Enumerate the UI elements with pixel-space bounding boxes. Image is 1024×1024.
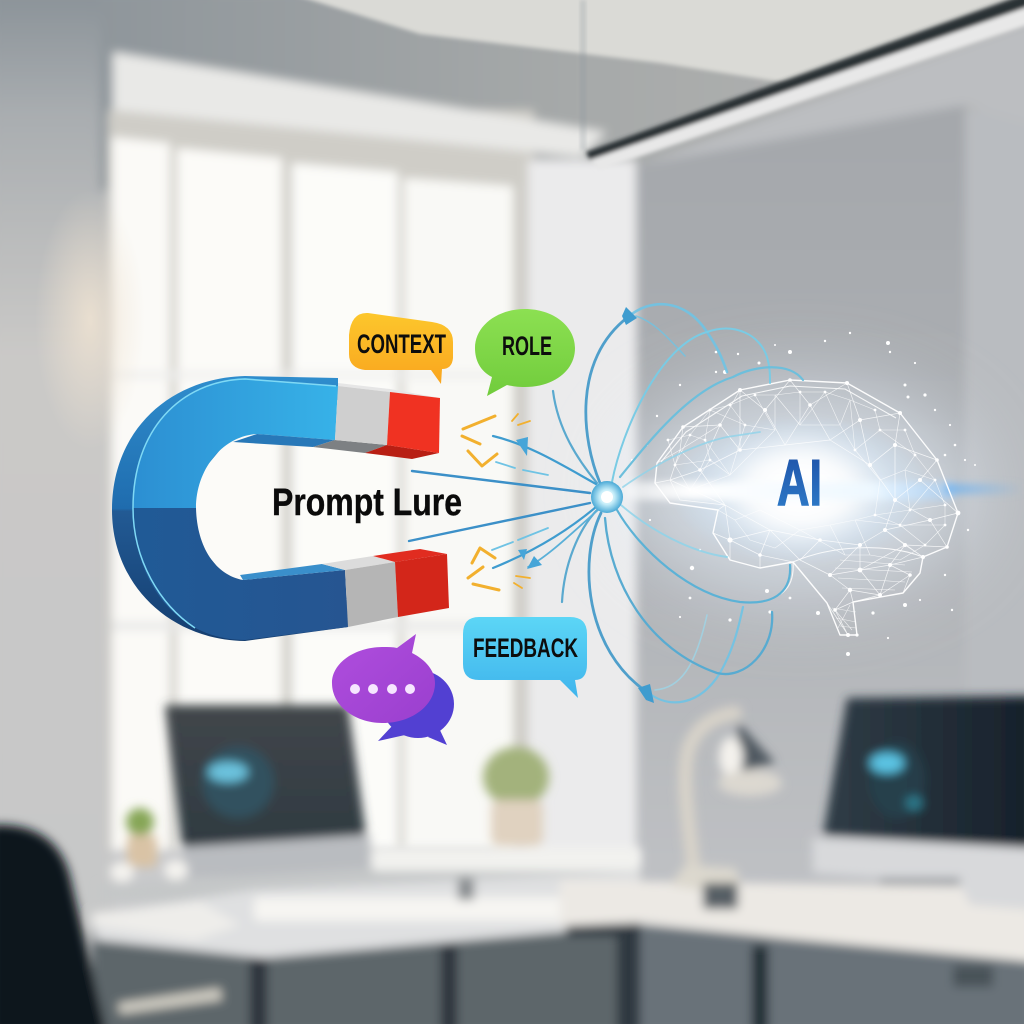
upper arm underside [233, 434, 335, 447]
magnet [112, 376, 449, 641]
upper arc two [612, 329, 770, 482]
arrow ray upper [493, 436, 596, 484]
upper arm top surface sliver [338, 383, 440, 398]
window sunlight [35, 190, 145, 450]
brain mesh fine [668, 392, 945, 630]
ceiling pole [580, 0, 586, 150]
magnet highlight edge [133, 379, 336, 628]
lower red pole [395, 554, 449, 617]
attraction sparks [462, 414, 530, 590]
radial field lines [409, 304, 803, 703]
lower white band [345, 562, 398, 627]
speech bubble: feedback: FEEDBACK [473, 633, 578, 663]
lower outer arc with arrow [589, 513, 743, 703]
brain outline [655, 380, 958, 635]
monitor right [823, 696, 1024, 848]
upper arc four [623, 432, 760, 487]
lower arc four [621, 505, 727, 557]
magnet lower arm [133, 508, 348, 640]
right wall [636, 105, 965, 890]
plant left [126, 808, 154, 836]
monitor right stand [812, 838, 1024, 910]
desk front panels left [92, 920, 640, 1024]
drawer handle [118, 988, 222, 1014]
speech bubble: role: ROLE [502, 331, 552, 361]
magnet rear extrusion [112, 376, 348, 641]
left wall [0, 0, 114, 1024]
brain mesh coarse [655, 380, 958, 635]
speech bubble: context [349, 313, 453, 384]
monitor left [165, 705, 366, 847]
upper red pole [387, 392, 440, 453]
desk surface right [560, 880, 1024, 962]
column [528, 160, 636, 860]
ceiling cream panel [215, 0, 1024, 85]
inner curved rays [553, 391, 597, 483]
desk surface left [92, 872, 640, 958]
back desk [100, 855, 640, 905]
chair [0, 825, 107, 1024]
speech bubble: role [475, 309, 575, 396]
lamp [685, 713, 735, 880]
arrow ray lower [493, 507, 596, 568]
brain particles [631, 332, 976, 656]
AI brain wireframe [655, 380, 958, 635]
speech bubble: context: CONTEXT [357, 329, 446, 359]
upper right ceiling [640, 20, 1024, 165]
speech bubbles: chat dots [332, 634, 454, 745]
ceiling beam [586, 0, 1024, 170]
left main rays [412, 471, 590, 493]
desk right panels [640, 925, 1024, 1024]
lower arm top surface [240, 564, 345, 580]
ceiling left [100, 0, 1024, 190]
label: AI: AI [777, 446, 822, 519]
fissure outline [661, 386, 923, 603]
upper arc three [620, 367, 803, 477]
lower arc three [617, 510, 790, 603]
upper white band [335, 386, 390, 445]
convergence orb [591, 481, 623, 513]
speech bubble: feedback [463, 617, 587, 698]
plant centre [483, 747, 549, 807]
magnet upper arm [133, 378, 338, 508]
brain network glow [625, 385, 1024, 595]
window surround [108, 110, 534, 850]
lower arc two [605, 518, 772, 674]
upper outer arc with arrow [586, 304, 727, 483]
window panes [112, 137, 514, 850]
soffit [113, 52, 606, 157]
label: Prompt Lure: Prompt Lure [272, 482, 462, 524]
